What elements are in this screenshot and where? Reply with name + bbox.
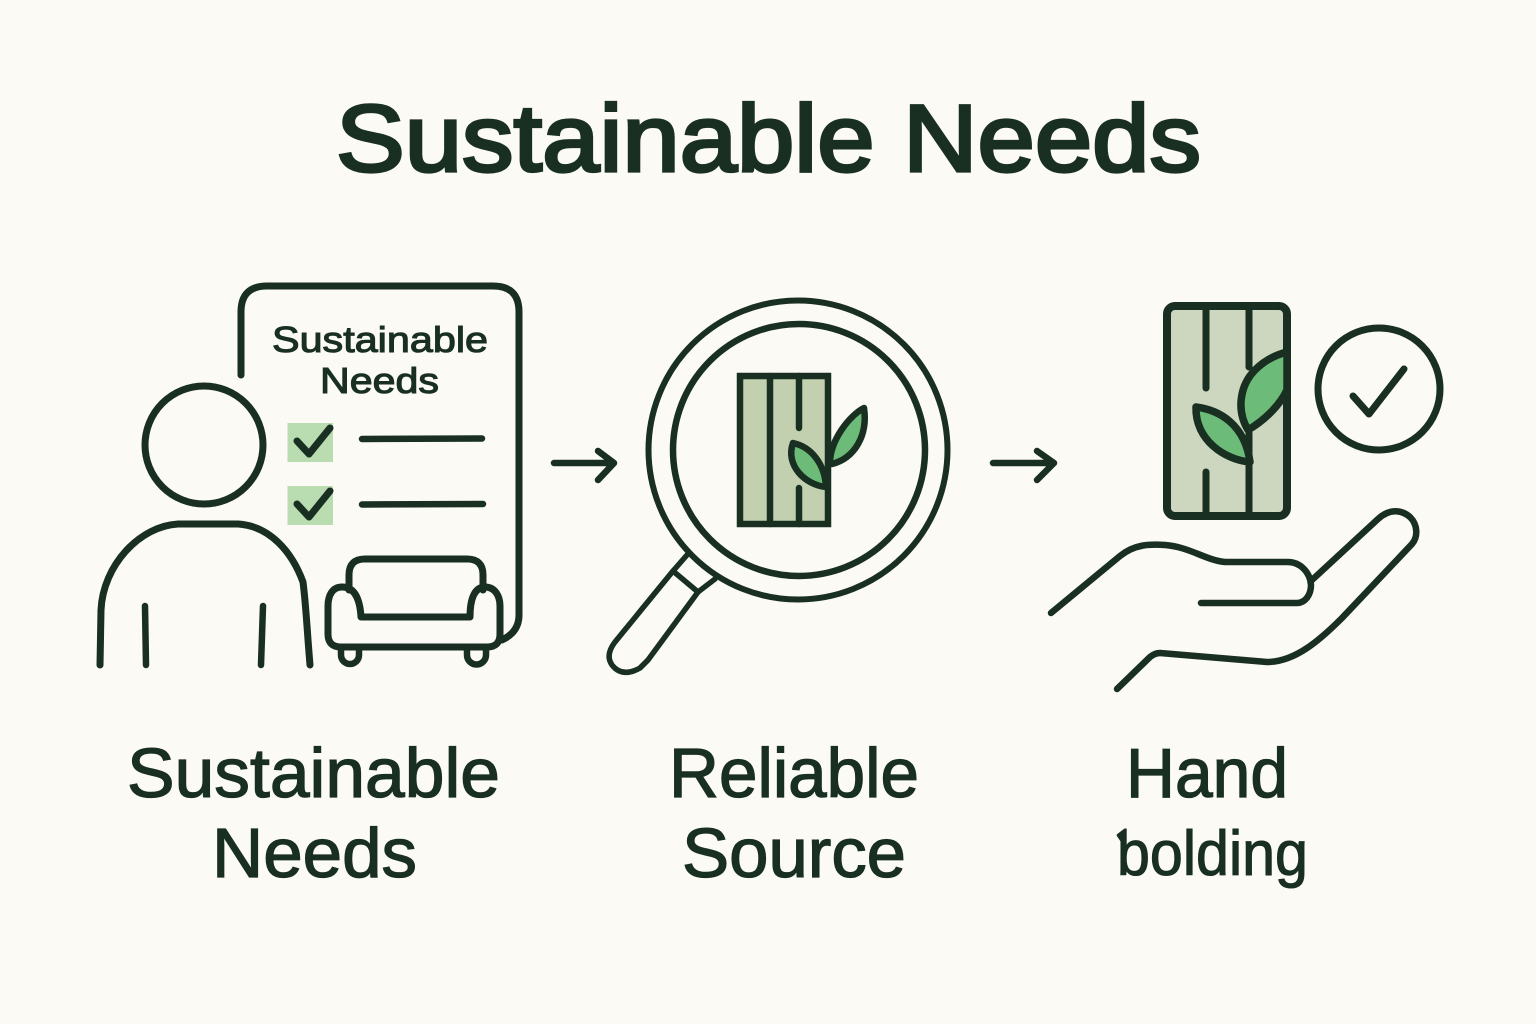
label: sustainable needs: Needs <box>212 814 417 892</box>
label: hand holding <box>1117 734 1308 889</box>
arrow 1 <box>554 451 614 480</box>
icon: check circle <box>1318 328 1440 450</box>
panel: hand holding <box>1051 306 1440 889</box>
label: reliable source: Source <box>682 814 906 892</box>
panel: sustainable needs <box>100 286 519 892</box>
document heading: Sustainable <box>272 319 488 360</box>
checklist row 2 <box>288 486 483 525</box>
label: hand holding: ƅolding <box>1117 819 1308 889</box>
label: hand holding: Hand <box>1126 734 1288 812</box>
panel: reliable source <box>609 300 948 892</box>
title: Sustainable Needs <box>336 86 1201 192</box>
document heading <box>272 319 488 401</box>
document heading: Needs <box>320 360 439 401</box>
label: sustainable needs: Sustainable <box>127 734 500 812</box>
label: reliable source <box>669 734 919 892</box>
label: reliable source: Reliable <box>669 734 919 812</box>
icon: sofa <box>328 559 500 665</box>
label: sustainable needs <box>127 734 500 892</box>
icon: bamboo card <box>1167 306 1287 516</box>
icon: bamboo sample <box>740 376 865 524</box>
arrow 2 <box>993 451 1054 480</box>
icon: open hand <box>1051 511 1416 689</box>
checklist row 1 <box>288 423 482 462</box>
icon: checklist document <box>241 286 519 640</box>
icon: magnifying glass <box>609 300 948 672</box>
icon: person <box>100 386 310 665</box>
